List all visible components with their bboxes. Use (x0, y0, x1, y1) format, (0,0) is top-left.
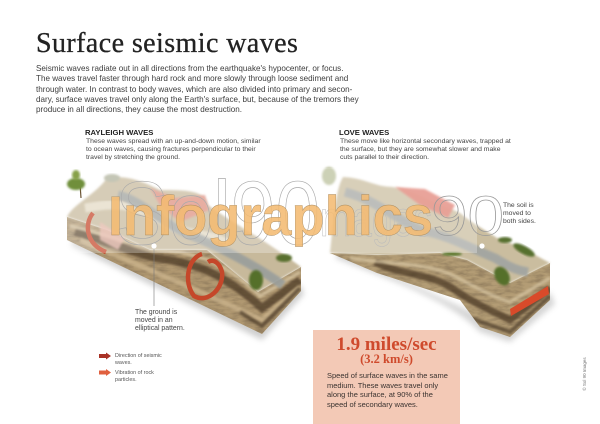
legend text: vibration: particles. (115, 376, 137, 382)
text: Love description: These move like horizontal secondary waves, trapped at (340, 138, 511, 145)
callout: Love soil: The soil is (503, 202, 534, 209)
intro text: The waves travel faster through hard rock and more slowly through loose sediment and (36, 74, 348, 83)
legend text: vibration: Vibration of rock (115, 370, 154, 376)
heading: Rayleigh waves: RAYLEIGH WAVES (85, 128, 153, 137)
red glow left (100, 222, 125, 250)
text: Rayleigh description: to ocean waves, causing fractures perpendicular to their (86, 146, 256, 153)
wave direction arrow (510, 286, 549, 316)
callout: Love soil: moved to (503, 210, 531, 217)
watermark fill: Infographics: Infographics (108, 184, 433, 247)
title: Surface seismic waves (36, 28, 298, 59)
speed description (327, 371, 448, 409)
text: Rayleigh description (86, 138, 261, 161)
text: Rayleigh description: These waves spread with an up-and-down motion, similar (86, 138, 261, 145)
top surface (67, 177, 301, 292)
watermark (108, 164, 504, 264)
block diagram: Rayleigh (60, 174, 305, 340)
callout: Love soil (503, 202, 536, 225)
intro text: dary, surface waves travel only along the Earth's surface, but, because of the tremors they (36, 95, 359, 104)
credit: © Sol 90 Images (582, 357, 587, 391)
callout: Rayleigh ground: The ground is (135, 309, 177, 316)
road (118, 195, 283, 285)
hill highlights (85, 205, 228, 244)
panel: speed (313, 330, 460, 424)
vibration arrow left (88, 213, 106, 252)
intro text: Seismic waves radiate out in all directions from the earthquake's hypocenter, or focus. (36, 64, 343, 73)
intro text (36, 64, 359, 114)
legend icon: vibration of rock particles (99, 369, 111, 376)
watermark outline: 90: 90 (431, 184, 504, 247)
ground shadow (72, 238, 304, 340)
callout pointer (151, 243, 157, 306)
speed metric: (3.2 km/s) (360, 352, 413, 366)
red glow area (150, 188, 209, 222)
vibration arrow right (188, 254, 222, 298)
legend text: direction: waves. (115, 360, 132, 366)
icon: tree (322, 167, 336, 185)
speed description: medium. These waves travel only (327, 381, 438, 390)
heading: Love waves: LOVE WAVES (339, 128, 389, 137)
text: Rayleigh description: travel by stretching the ground. (86, 154, 180, 161)
dark strata (375, 262, 550, 320)
legend text: direction: Direction of seismic (115, 353, 162, 359)
speed description: along the surface, at 90% of the (327, 390, 433, 399)
text: Love description (340, 138, 511, 161)
callout pointer (479, 243, 485, 249)
callout: Rayleigh ground (135, 308, 185, 332)
bush back (104, 174, 120, 182)
ground shadow (335, 250, 555, 342)
top surface (330, 177, 550, 283)
text: Love description: cuts parallel to their direction. (340, 154, 429, 161)
callout: Rayleigh ground: elliptical pattern. (135, 325, 185, 332)
grass patches (249, 270, 263, 290)
diagrams (65, 166, 556, 376)
legend text: direction (115, 353, 162, 366)
watermark outline: mages: mages (320, 191, 432, 247)
text: Love description: the surface, but they are somewhat slower and make (340, 146, 501, 153)
red glow area (395, 187, 455, 218)
front face (67, 217, 301, 334)
speed description: speed of secondary waves. (327, 400, 418, 409)
road (345, 192, 528, 272)
watermark wash (62, 168, 477, 253)
callout: Rayleigh ground: moved in an (135, 317, 173, 324)
speed value: 1.9 miles/sec (336, 334, 437, 355)
block diagram: Love (322, 167, 555, 342)
speed description: Speed of surface waves in the same (327, 371, 448, 380)
intro text: through water. In contrast to body waves, which are also divided into primary and secon- (36, 85, 352, 94)
callout: Love soil: both sides. (503, 218, 536, 225)
watermark outline: Sol90: Sol90 (115, 164, 320, 264)
icon: tree left (67, 170, 85, 198)
dark strata (75, 232, 300, 308)
legend text: vibration (115, 370, 154, 382)
intro text: produce in all directions, they cause the most destruction. (36, 105, 242, 114)
grass patches (491, 264, 513, 288)
front face (330, 253, 550, 337)
legend icon: direction of seismic waves (99, 352, 111, 360)
